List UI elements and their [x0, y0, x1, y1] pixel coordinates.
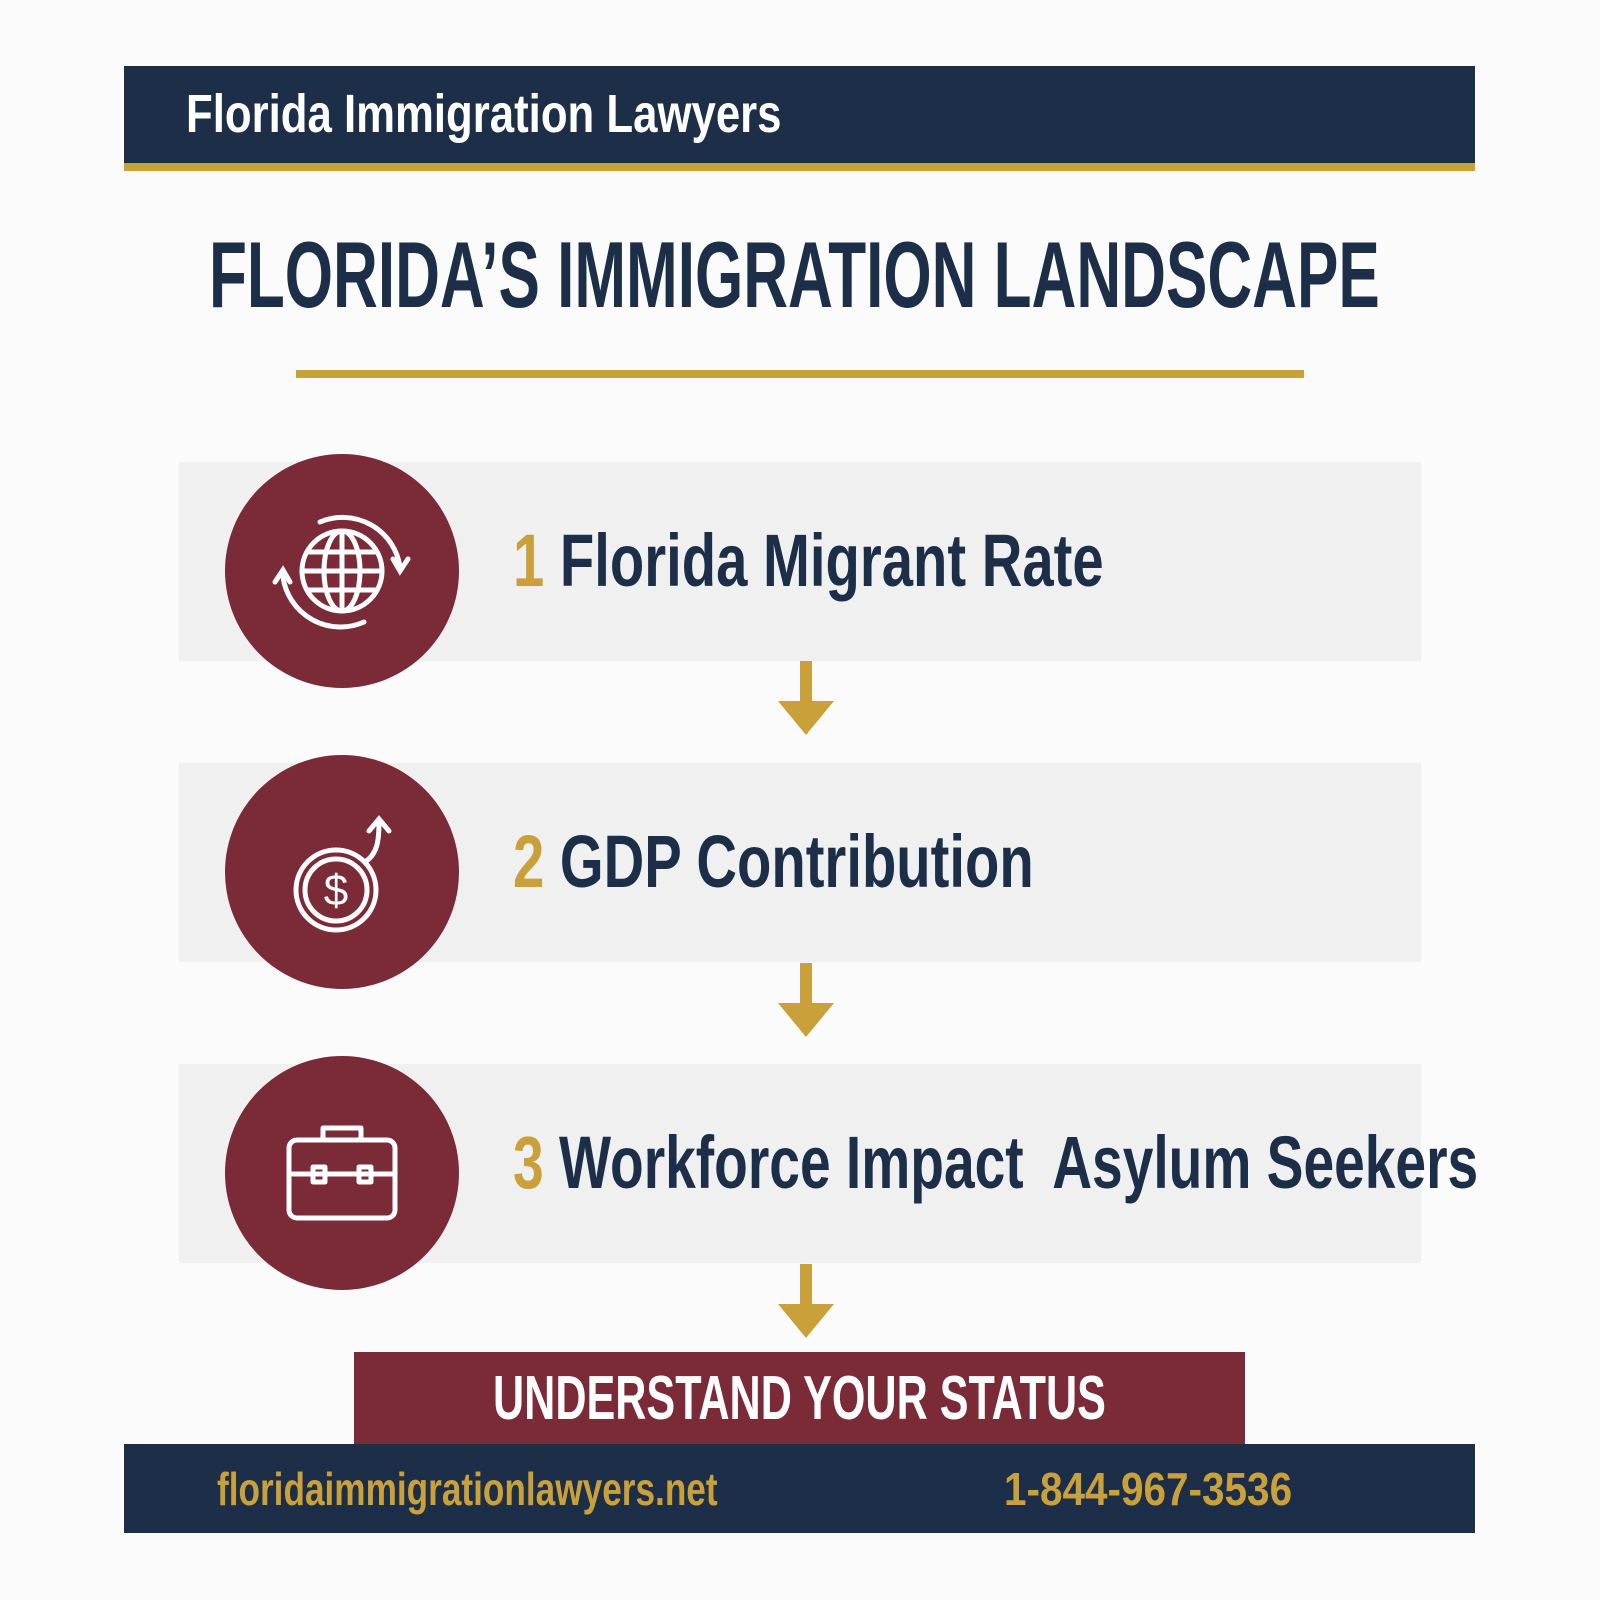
- title: FLORIDA’S IMMIGRATION LANDSCAPE: [209, 222, 1380, 327]
- arrow 2: [778, 963, 834, 1037]
- panel: row 3: [179, 1064, 1421, 1263]
- footer website: floridaimmigrationlawyers.net: [217, 1463, 718, 1515]
- header bar: [124, 66, 1475, 171]
- row 3 text: 3 Workforce Impact Asylum Seekers: [513, 1121, 1478, 1204]
- panel: row 2: [179, 763, 1421, 962]
- arrow 3: [778, 1264, 834, 1338]
- icon: globe: [225, 454, 459, 688]
- row 2 text: 2 GDP Contribution: [513, 820, 1034, 903]
- icon: dollar: [225, 755, 459, 989]
- row 1 text: 1 Florida Migrant Rate: [513, 519, 1104, 602]
- icon: briefcase: [225, 1056, 459, 1290]
- panel: row 1: [179, 462, 1421, 661]
- header text: Florida Immigration Lawyers: [186, 84, 781, 144]
- title underline: [296, 370, 1304, 378]
- footer bar: [124, 1444, 1475, 1533]
- CTA text: UNDERSTAND YOUR STATUS: [493, 1364, 1106, 1433]
- CTA banner: [354, 1352, 1245, 1444]
- footer phone: 1-844-967-3536: [1004, 1463, 1292, 1515]
- icon: dollar: $: [324, 866, 348, 915]
- arrow 1: [778, 661, 834, 735]
